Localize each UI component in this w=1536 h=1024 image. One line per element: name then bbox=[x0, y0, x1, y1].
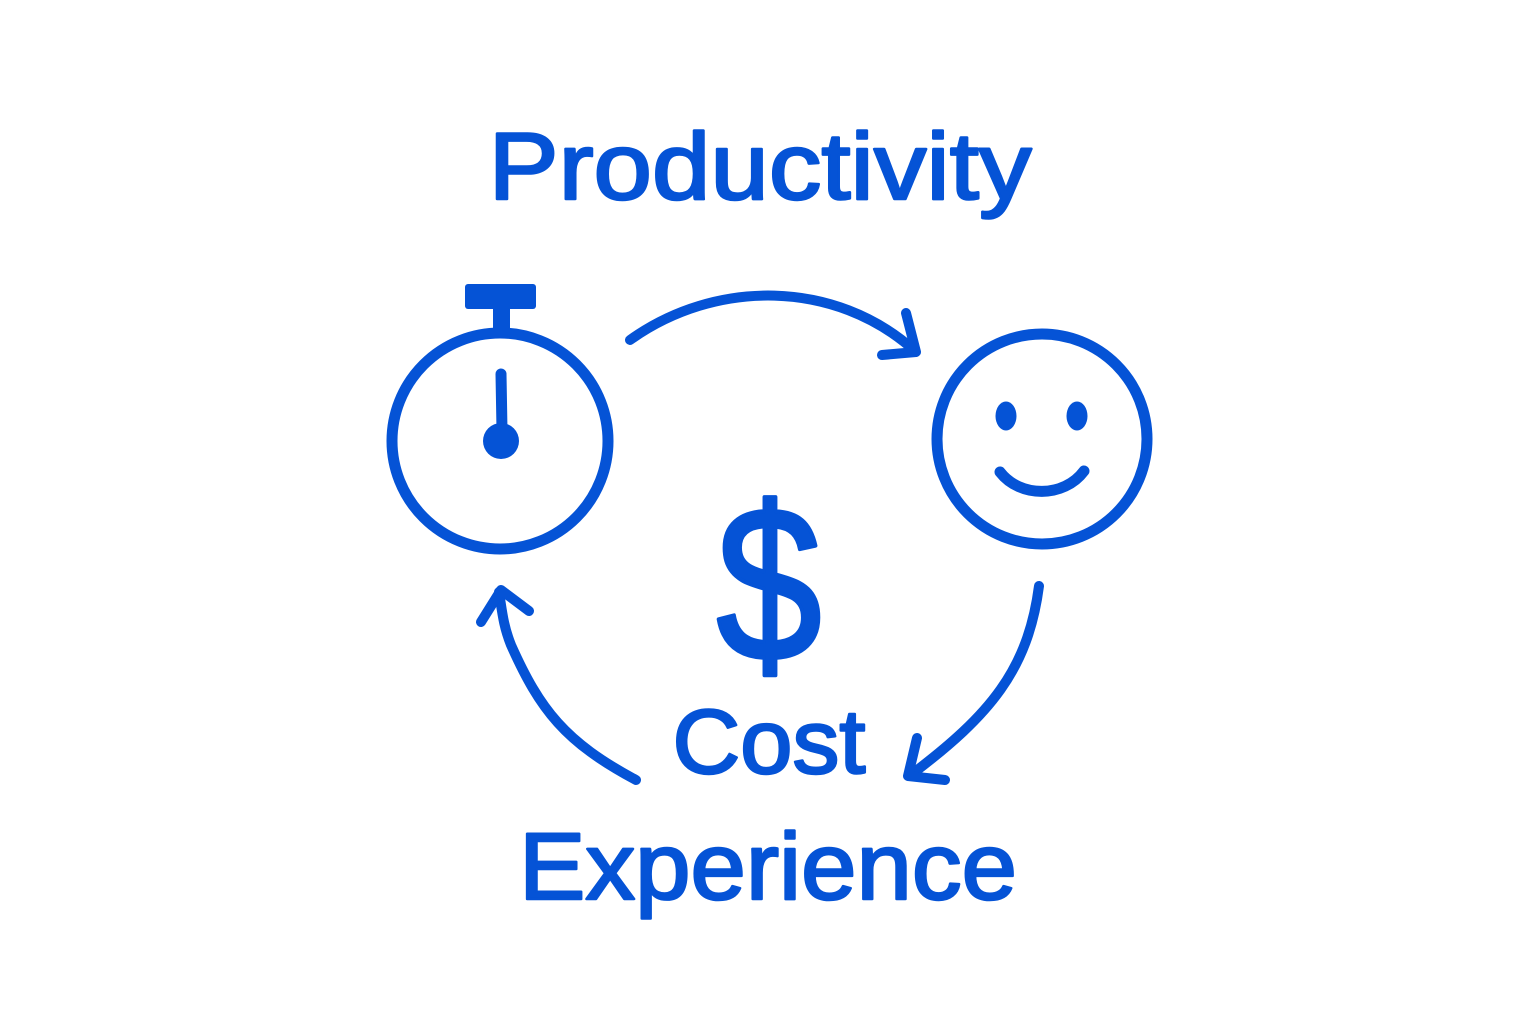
label: Cost: Cost bbox=[672, 692, 866, 793]
arrow: stopwatch to smiley bbox=[630, 296, 916, 355]
icon: stopwatch bbox=[392, 284, 608, 549]
label: Experience: Experience bbox=[519, 814, 1017, 920]
icon: smiley face bbox=[937, 334, 1147, 544]
title: Productivity: Productivity bbox=[488, 114, 1032, 220]
arrow: smiley to cost bbox=[908, 586, 1039, 780]
arrow: experience to stopwatch bbox=[481, 590, 636, 780]
icon: dollar sign: $ bbox=[716, 462, 822, 707]
